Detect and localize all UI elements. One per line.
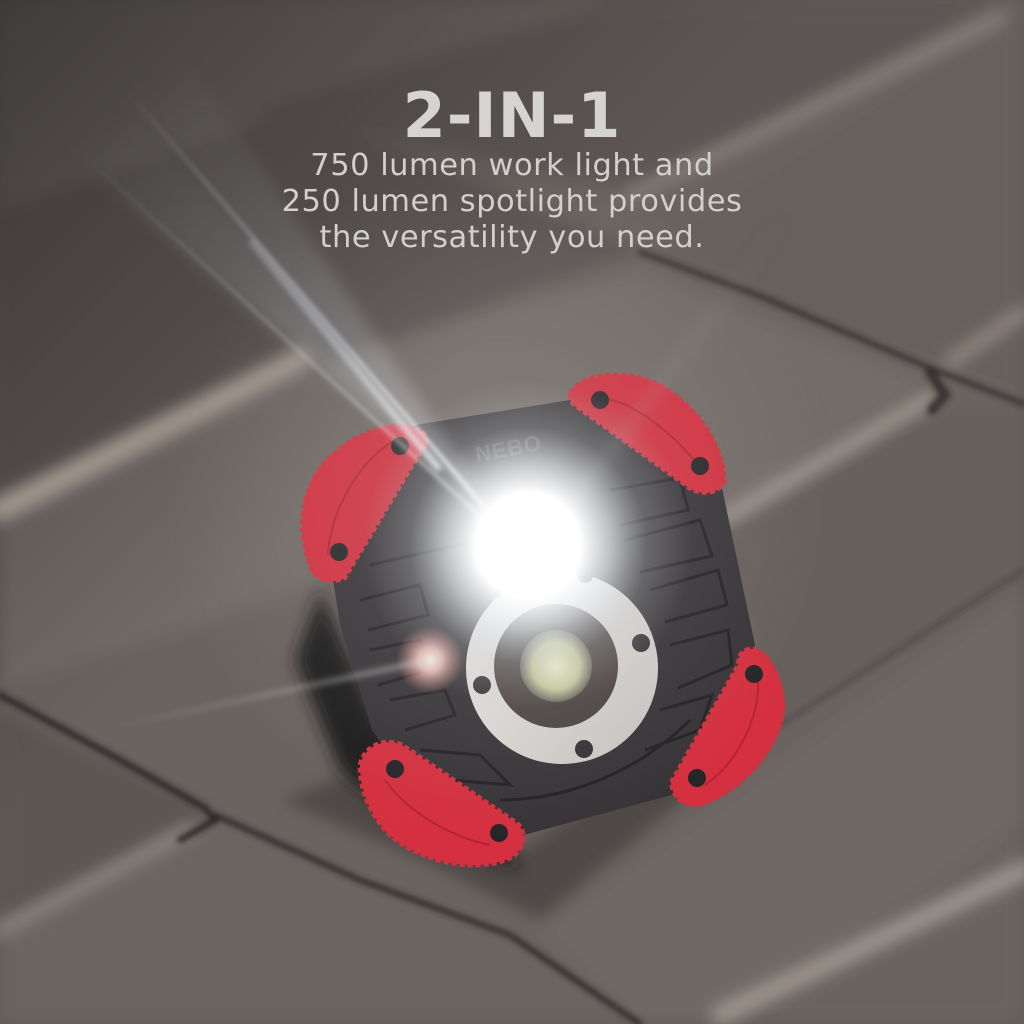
device shadow <box>295 590 520 870</box>
brick joints <box>0 252 1024 1024</box>
bumper: bottom right <box>671 649 784 806</box>
headline copy <box>282 79 742 255</box>
light device <box>295 374 784 870</box>
title: 2-IN-1 <box>403 79 621 152</box>
brand mark: NEBO <box>473 430 544 467</box>
body grooves <box>360 478 732 800</box>
spotlight ring <box>466 567 658 764</box>
bumper: top right <box>569 374 725 493</box>
description: the versatility you need. <box>320 220 704 255</box>
light rays <box>20 20 790 730</box>
device body <box>330 400 755 836</box>
description: 750 lumen work light and <box>310 148 714 183</box>
small red indicator glow <box>396 626 464 694</box>
description: 250 lumen spotlight provides <box>282 184 742 219</box>
main flood light bloom <box>363 380 693 710</box>
bumper: top left <box>302 426 427 581</box>
description <box>282 148 742 255</box>
bumper: bottom left <box>360 742 523 865</box>
haze over scene <box>160 160 840 840</box>
